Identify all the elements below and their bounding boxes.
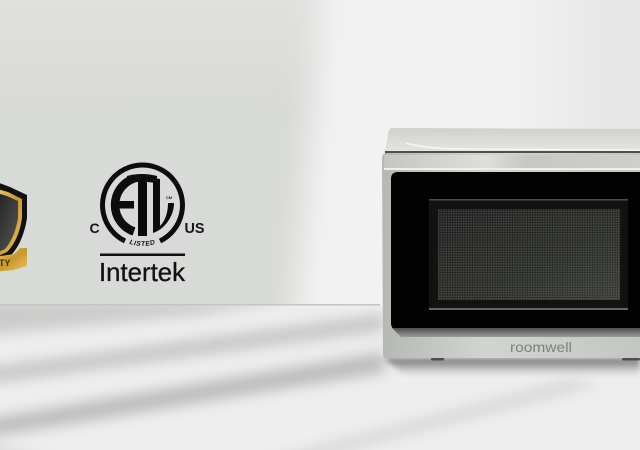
Intertek wordmark: Intertek (99, 257, 186, 287)
mesh screen (438, 209, 620, 300)
ribbon (0, 248, 27, 272)
wall background (0, 0, 640, 305)
brand name: roomwell (510, 339, 572, 355)
CM mark: CM (166, 195, 173, 200)
letter E (115, 178, 134, 232)
logo: ETL listed mark (90, 162, 205, 287)
ETL outer ring (102, 165, 182, 241)
shield black border (0, 181, 27, 264)
LISTED label: LISTED (129, 240, 155, 246)
door lower handle strip (392, 328, 640, 337)
front body (382, 153, 640, 358)
C label: C (90, 220, 100, 236)
letter T (127, 174, 157, 236)
feet (431, 358, 444, 360)
top band (384, 155, 640, 168)
divider (100, 254, 185, 256)
icon: gold warranty shield badge (0, 181, 27, 272)
floor shadow bands (0, 300, 600, 450)
wall light shaft (288, 0, 640, 305)
microwave (382, 128, 640, 360)
letter L (153, 178, 174, 233)
floor background (0, 305, 640, 450)
microwave shadow (384, 358, 640, 376)
US label: US (184, 221, 205, 237)
shield dark face (0, 192, 18, 254)
top panel (385, 128, 640, 152)
inner door frame (429, 199, 628, 310)
door black window (391, 172, 640, 330)
shield gold rim (0, 188, 22, 258)
